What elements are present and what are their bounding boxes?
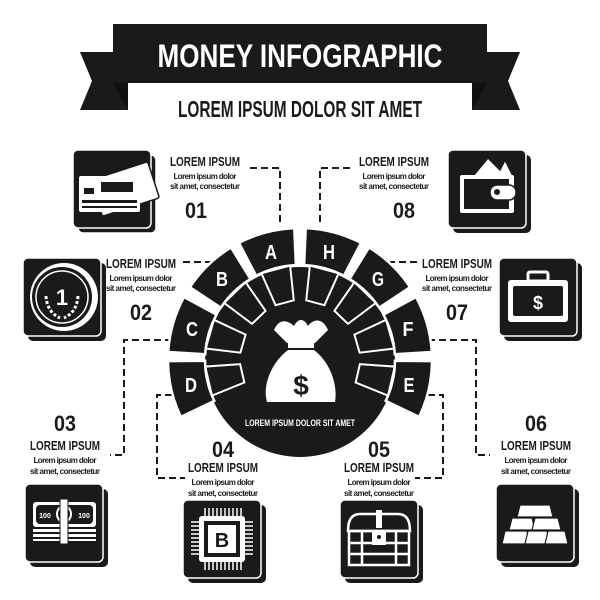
icon: briefcase bbox=[499, 258, 582, 341]
icon: banknote bundle: 100 bbox=[78, 513, 90, 520]
central chart: A bbox=[265, 242, 277, 264]
text block 07: Lorem ipsum dolor bbox=[426, 274, 488, 283]
central chart: D bbox=[185, 375, 197, 397]
text block 08: sit amet, consectetur bbox=[359, 182, 429, 191]
text block 03 bbox=[30, 411, 100, 476]
icon: coin bbox=[23, 258, 106, 341]
icon: bitcoin chip bbox=[183, 500, 266, 583]
text block 05: 05 bbox=[368, 437, 390, 462]
text block 08: LOREM IPSUM bbox=[359, 154, 429, 169]
icon: money bag bbox=[266, 320, 336, 402]
text block 06: 06 bbox=[525, 411, 547, 436]
text block 01: sit amet, consectetur bbox=[170, 182, 240, 191]
icon: gold bars bbox=[496, 484, 579, 567]
text block 02: Lorem ipsum dolor bbox=[110, 274, 172, 283]
text block 01: 01 bbox=[185, 198, 207, 223]
text block 05: Lorem ipsum dolor bbox=[348, 478, 410, 487]
text block 05: LOREM IPSUM bbox=[344, 460, 414, 475]
text block 01: LOREM IPSUM bbox=[170, 154, 240, 169]
central chart bbox=[165, 225, 435, 457]
text block 03: 03 bbox=[54, 411, 76, 436]
title: MONEY INFOGRAPHIC bbox=[158, 38, 442, 74]
icon: wallet bbox=[448, 150, 531, 233]
text block 05: sit amet, consectetur bbox=[344, 489, 414, 498]
text block 04: 04 bbox=[212, 437, 235, 462]
icon: money bag: $ bbox=[293, 370, 309, 401]
dashed connectors bbox=[110, 168, 490, 478]
text block 02: 02 bbox=[130, 300, 152, 325]
text block 04: Lorem ipsum dolor bbox=[192, 478, 254, 487]
text block 04: sit amet, consectetur bbox=[188, 489, 258, 498]
icon: coin: 1 bbox=[56, 285, 68, 310]
central chart: H bbox=[323, 242, 335, 264]
text block 02: sit amet, consectetur bbox=[106, 284, 176, 293]
text block 03: LOREM IPSUM bbox=[30, 438, 100, 453]
text block 01 bbox=[170, 154, 240, 223]
text block 08 bbox=[359, 154, 429, 223]
text block 02: LOREM IPSUM bbox=[106, 256, 176, 271]
text block 03: sit amet, consectetur bbox=[30, 467, 100, 476]
text block 07: sit amet, consectetur bbox=[422, 284, 492, 293]
icon: briefcase: $ bbox=[533, 293, 543, 313]
text block 07: LOREM IPSUM bbox=[422, 256, 492, 271]
text block 08: 08 bbox=[393, 198, 415, 223]
text block 04 bbox=[188, 437, 258, 498]
text block 07: 07 bbox=[446, 300, 468, 325]
text block 03: Lorem ipsum dolor bbox=[34, 456, 96, 465]
icon: banknote bundle bbox=[25, 484, 108, 567]
text block 02 bbox=[106, 256, 176, 325]
text block 08: Lorem ipsum dolor bbox=[362, 172, 426, 181]
central chart: G bbox=[372, 269, 384, 291]
text block 06: sit amet, consectetur bbox=[501, 467, 571, 476]
banner bbox=[80, 24, 520, 110]
icon: credit cards bbox=[73, 150, 159, 233]
central chart: B bbox=[216, 269, 228, 291]
icon: bitcoin chip: B bbox=[215, 530, 229, 552]
central chart: F bbox=[402, 319, 414, 341]
central chart: E bbox=[404, 375, 414, 397]
text block 04: LOREM IPSUM bbox=[188, 460, 258, 475]
text block 07 bbox=[422, 256, 492, 325]
chart caption: LOREM IPSUM DOLOR SIT AMET bbox=[245, 418, 355, 428]
central chart: C bbox=[186, 319, 198, 341]
text block 06: LOREM IPSUM bbox=[501, 438, 571, 453]
text block 05 bbox=[344, 437, 414, 498]
icon: banknote bundle: 100 bbox=[39, 513, 51, 520]
icon: treasure chest bbox=[340, 500, 423, 583]
text block 06 bbox=[501, 411, 571, 476]
text block 01: Lorem ipsum dolor bbox=[174, 172, 236, 181]
subtitle: LOREM IPSUM DOLOR SIT AMET bbox=[178, 96, 422, 122]
text block 06: Lorem ipsum dolor bbox=[504, 456, 568, 465]
